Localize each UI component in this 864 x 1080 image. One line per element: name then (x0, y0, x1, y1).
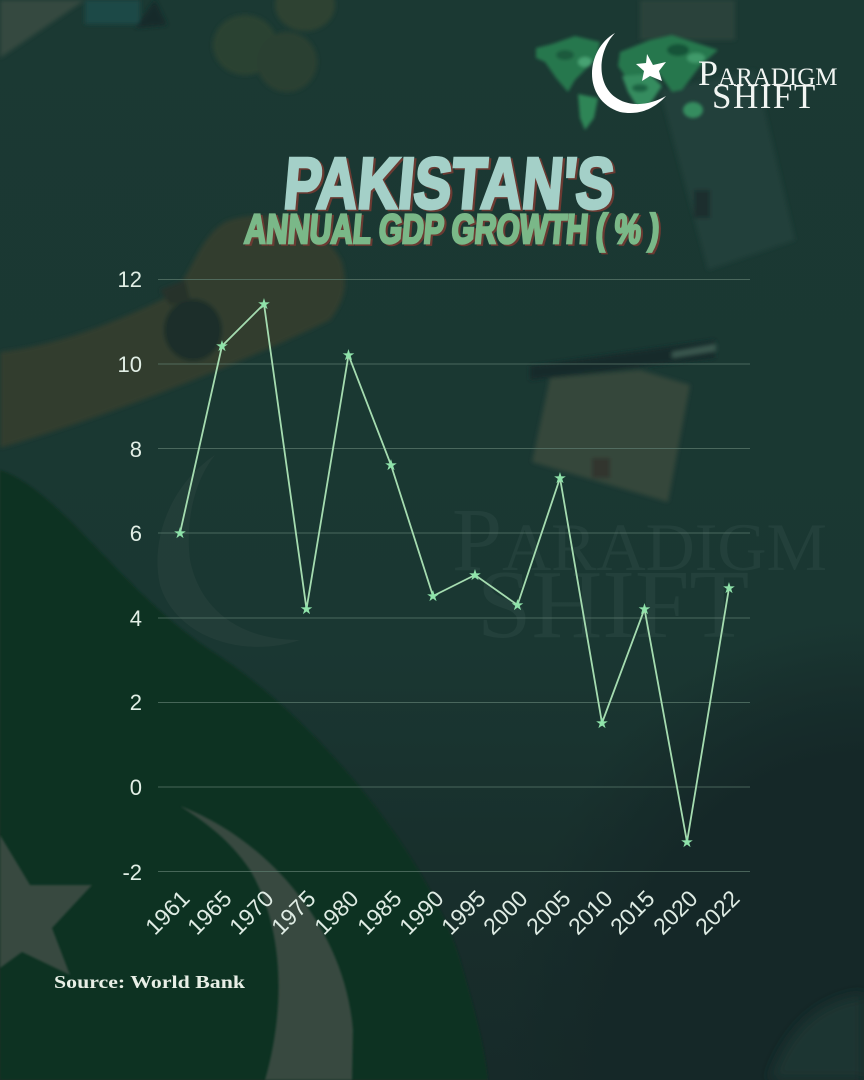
arm and hand (0, 216, 345, 448)
data markers: ★ (257, 295, 271, 313)
x axis labels: 1965 (182, 885, 237, 940)
y axis labels: 8 (130, 437, 142, 462)
data markers: ★ (173, 524, 187, 542)
x axis labels: 2010 (563, 885, 618, 940)
subheading: Annual GDP Growth: ANNUAL GDP GROWTH ( % ) (243, 205, 661, 252)
y axis labels: 12 (118, 267, 142, 292)
flag hill (0, 470, 488, 1080)
flag star (0, 835, 92, 975)
grid lines (158, 280, 750, 872)
data markers: ★ (384, 456, 398, 474)
title (243, 142, 664, 254)
data markers: ★ (680, 833, 694, 851)
x axis labels: 1975 (266, 885, 321, 940)
data markers: ★ (215, 337, 229, 355)
y axis labels: 10 (118, 352, 142, 377)
x axis labels (140, 885, 745, 940)
data markers: ★ (553, 469, 567, 487)
x axis labels: 2022 (690, 885, 745, 940)
y axis labels: 6 (130, 521, 142, 546)
watermark: SHIFT (477, 551, 749, 659)
x axis labels: 1970 (224, 885, 279, 940)
icon: star (636, 54, 666, 81)
y axis labels: 0 (130, 775, 142, 800)
faint watermark crescent (157, 455, 300, 647)
y axis labels: -2 (122, 860, 142, 885)
y axis labels: 4 (130, 606, 142, 631)
watermark: PARADIGM (452, 491, 827, 590)
data line (180, 304, 729, 842)
logo: Paradigm Shift (536, 33, 837, 130)
data markers: ★ (468, 566, 482, 584)
y axis labels: 2 (130, 690, 142, 715)
icon: world map (536, 35, 718, 130)
dark lower right (500, 620, 864, 1080)
data markers: ★ (511, 596, 524, 614)
x axis labels: 1961 (140, 885, 195, 940)
source note: Source: World Bank (54, 972, 245, 992)
data markers: ★ (342, 346, 355, 364)
x axis labels: 2015 (605, 885, 660, 940)
x axis labels: 1980 (309, 885, 364, 940)
x axis labels: 1985 (352, 885, 407, 940)
flag crescent (180, 806, 353, 1080)
y axis labels (118, 267, 142, 885)
logo wordmark: PARADIGM (698, 53, 837, 93)
line chart (118, 267, 750, 940)
x axis labels: 2000 (478, 885, 533, 940)
icon: crescent (592, 33, 666, 113)
heading: Pakistan's: PAKISTAN'S (283, 144, 620, 225)
subheading: Annual GDP Growth: ANNUAL GDP GROWTH ( % ) (245, 207, 664, 254)
x axis labels: 2020 (648, 885, 703, 940)
x axis labels: 1990 (394, 885, 449, 940)
data markers: ★ (300, 600, 313, 618)
data markers: ★ (595, 714, 609, 732)
heading: Pakistan's: PAKISTAN'S (281, 142, 618, 224)
data markers: ★ (426, 587, 440, 605)
x axis labels: 2005 (521, 885, 576, 940)
logo wordmark (698, 53, 837, 116)
logo wordmark: SHIFT (712, 77, 817, 116)
x axis labels: 1995 (436, 885, 491, 940)
data markers: ★ (638, 600, 651, 618)
data markers: ★ (722, 579, 736, 597)
data markers (173, 295, 736, 851)
watermark (452, 491, 827, 659)
